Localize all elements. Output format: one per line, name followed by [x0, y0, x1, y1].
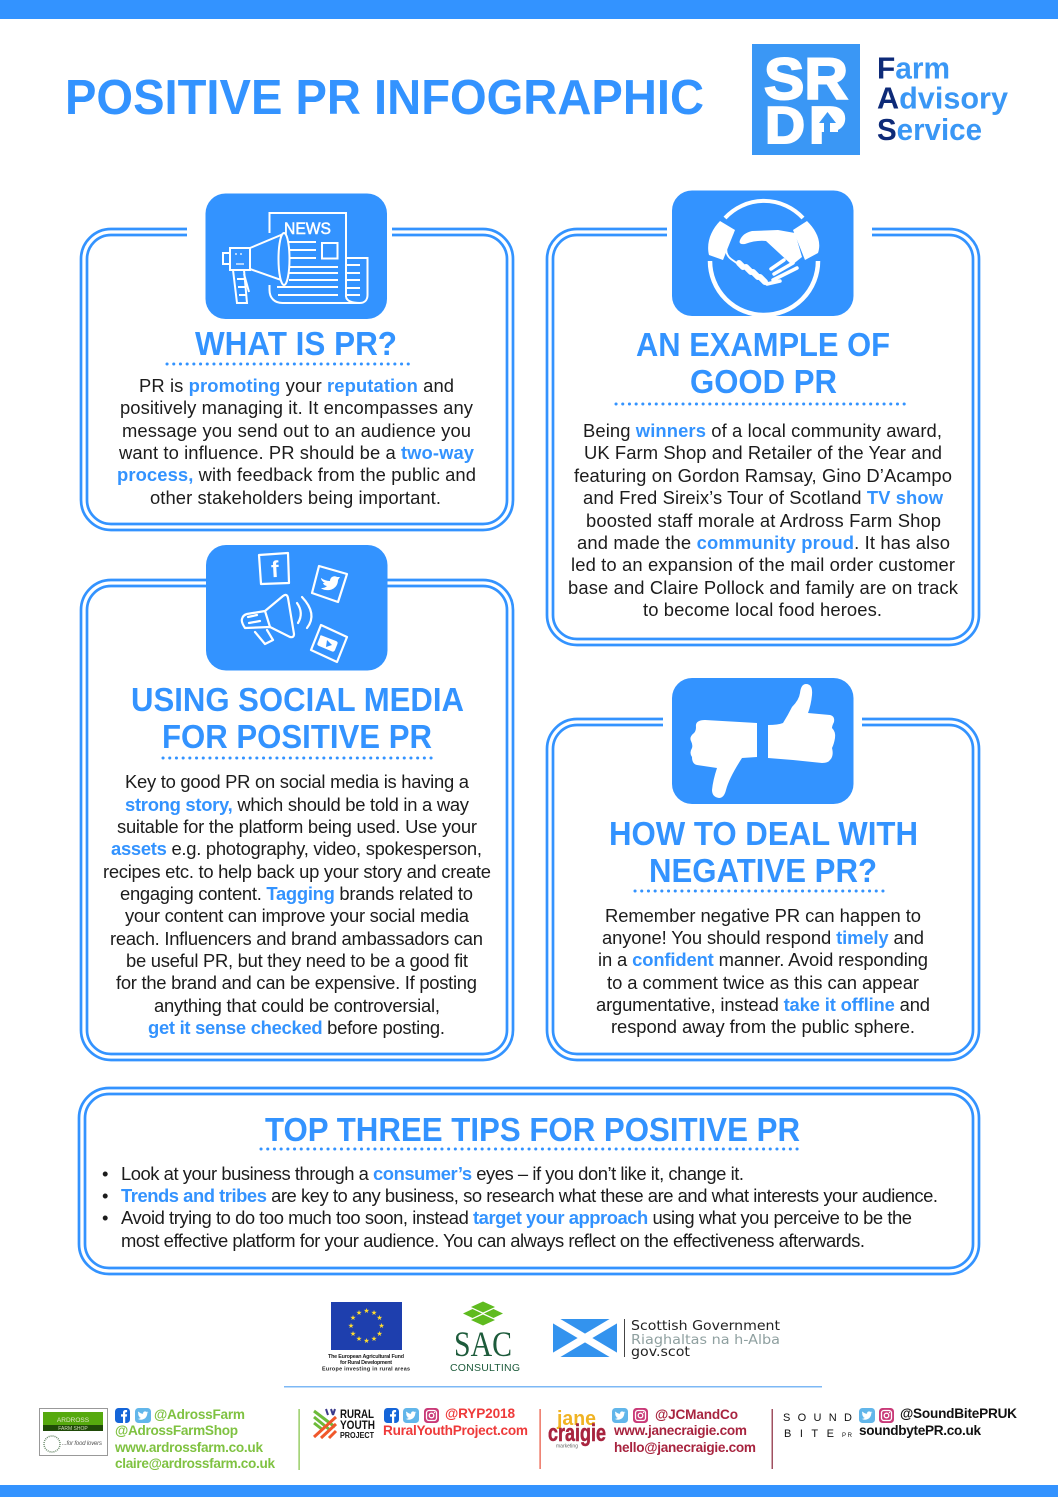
logo: Scottish Government: gov.scot — [631, 1345, 690, 1360]
logo: European Agricultural Fund: ★ — [350, 1314, 356, 1322]
logo: European Agricultural Fund: ★ — [376, 1314, 383, 1322]
body text: Remember negative PR can happen to — [605, 905, 921, 926]
body text: your content can improve your social media — [125, 905, 470, 926]
icon: thumbs down and thumbs up — [672, 678, 854, 804]
footer: Ardross Farm — [40, 1407, 275, 1471]
dotted underline — [635, 890, 888, 892]
body text: reach. Influencers and brand ambassadors can — [110, 928, 483, 949]
logo: Ardross Farm Shop: FARM SHOP — [58, 1426, 88, 1432]
bullet list: Trends and tribes are key to any business, so research what these are and what interests your audience. — [121, 1185, 938, 1206]
logo: Rural Youth Project: RURAL — [340, 1407, 374, 1421]
body text: argumentative, instead take it offline and — [596, 994, 930, 1015]
social icon: twitter — [612, 1408, 628, 1423]
logo: European Agricultural Fund: ★ — [356, 1309, 362, 1317]
body text: respond away from the public sphere. — [611, 1016, 915, 1037]
vertical separator maroon — [772, 1409, 773, 1469]
body text — [596, 905, 930, 1037]
logo: European Agricultural Fund: ★ — [356, 1335, 362, 1343]
body text — [117, 375, 476, 508]
logo: Jane Craigie Marketing: marketing — [556, 1444, 578, 1450]
body text: recipes etc. to help back up your story and create — [103, 861, 491, 882]
social icon: instagram — [879, 1408, 894, 1423]
contact text — [859, 1406, 1017, 1438]
heading: TOP THREE TIPS FOR POSITIVE PR — [265, 1111, 800, 1148]
logo: Jane Craigie Marketing — [548, 1408, 606, 1450]
body text: get it sense checked before posting. — [148, 1017, 445, 1038]
icon: megaphone and social media: f — [270, 556, 280, 582]
social icon: facebook — [115, 1408, 130, 1423]
body text — [103, 771, 491, 1038]
body text: other stakeholders being important. — [150, 487, 441, 508]
icon: megaphone and social media — [206, 545, 388, 670]
body text: strong story, which should be told in a way — [125, 794, 470, 815]
body text: to a comment twice as this can appear — [607, 972, 919, 993]
body text: and Fred Sireix’s Tour of Scotland TV show — [583, 487, 944, 508]
logo: European Agricultural Fund: Europe investing in rural areas — [322, 1366, 410, 1372]
body text: PR is promoting your reputation and — [139, 375, 454, 396]
logo: SRDP Farm Advisory Service: Advisory — [877, 82, 1008, 116]
bullet list: Look at your business through a consumer’s eyes – if you don’t like it, change it. — [121, 1163, 744, 1184]
divider — [284, 1386, 822, 1388]
body text: Key to good PR on social media is having a — [125, 771, 470, 792]
logo: SRDP Farm Advisory Service: SR — [764, 47, 848, 112]
contact text — [383, 1406, 528, 1438]
vertical separator red — [540, 1409, 541, 1469]
contact text — [114, 1407, 275, 1471]
contact text: RuralYouthProject.com — [383, 1423, 528, 1438]
footer: Jane Craigie — [548, 1407, 756, 1455]
body text: boosted staff morale at Ardross Farm Shop — [586, 510, 941, 531]
logo: European Agricultural Fund: ★ — [350, 1330, 356, 1338]
logo: European Agricultural Fund: ★ — [348, 1322, 354, 1330]
bullet list: • — [102, 1207, 108, 1228]
social icon: instagram — [424, 1408, 439, 1423]
contact text: @JCMandCo — [655, 1407, 738, 1422]
contact text: www.janecraigie.com — [613, 1423, 747, 1438]
body text: engaging content. Tagging brands related to — [120, 883, 473, 904]
body text: to become local food heroes. — [643, 599, 882, 620]
title: POSITIVE PR INFOGRAPHIC — [65, 71, 704, 125]
icon: handshake — [672, 190, 854, 316]
logo: SRDP Farm Advisory Service: Farm — [877, 52, 950, 86]
body text: want to influence. PR should be a two-way — [118, 442, 475, 463]
logo: European Agricultural Fund: for Rural Development — [340, 1360, 392, 1366]
social icon: twitter — [403, 1408, 419, 1423]
body text: led to an expansion of the mail order customer — [571, 554, 955, 575]
logo: Sound Bite PR — [783, 1412, 853, 1440]
dotted underline — [167, 362, 413, 366]
body text: be useful PR, but they need to be a good fit — [126, 950, 468, 971]
vertical separator green — [298, 1409, 300, 1470]
logo: SRDP Farm Advisory Service: Service — [877, 113, 982, 147]
contact text: @AdrossFarm — [154, 1407, 245, 1422]
contact text: hello@janecraigie.com — [614, 1440, 756, 1455]
logo: Rural Youth Project: PROJECT — [340, 1431, 374, 1440]
body text: assets e.g. photography, video, spokesperson, — [111, 838, 482, 859]
body text: and made the community proud. It has also — [577, 532, 950, 553]
logo: Rural Youth Project: YOUTH — [340, 1418, 375, 1432]
heading — [609, 815, 918, 889]
social icon: twitter — [135, 1408, 151, 1423]
social icon: instagram — [633, 1408, 648, 1423]
footer: Rural Youth Project — [314, 1406, 528, 1440]
logo: Rural Youth Project — [314, 1407, 375, 1440]
contact text: claire@ardrossfarm.co.uk — [115, 1456, 275, 1471]
bullet list: Avoid trying to do too much too soon, instead target your approach using what you perceive to be the — [121, 1207, 912, 1228]
body text: UK Farm Shop and Retailer of the Year and — [584, 442, 942, 463]
heading: HOW TO DEAL WITH — [609, 815, 918, 852]
body text: featuring on Gordon Ramsay, Gino D’Acampo — [574, 465, 952, 486]
icon: newspaper and megaphone: NEWS — [284, 219, 331, 238]
panel: how to deal with negative PR — [547, 678, 979, 1060]
social icon: facebook — [384, 1408, 399, 1423]
contact text: @SoundBitePRUK — [900, 1406, 1017, 1421]
logo: Jane Craigie Marketing: jane — [556, 1408, 596, 1430]
bullet list: • — [102, 1163, 108, 1184]
bullet list: • — [102, 1185, 108, 1206]
logo: European Agricultural Fund: ★ — [378, 1322, 385, 1330]
bottom bar — [0, 1485, 1058, 1497]
logo: European Agricultural Fund — [322, 1302, 410, 1372]
logo: Ardross Farm Shop: ...for food lovers — [62, 1441, 102, 1447]
logo: Sound Bite PR: BITE — [784, 1428, 834, 1440]
logo: Scottish Government: Riaghaltas na h-Alba — [631, 1333, 780, 1348]
heading: AN EXAMPLE OF — [636, 326, 890, 363]
icon: newspaper and megaphone — [206, 194, 387, 319]
body text — [568, 420, 959, 620]
bullet list: most effective platform for your audience. You can always reflect on the effectiveness afterwards. — [121, 1230, 865, 1251]
logo: SRDP Farm Advisory Service: P — [809, 97, 846, 155]
body text: suitable for the platform being used. Use your — [117, 816, 477, 837]
footer: Sound Bite PR — [783, 1406, 1017, 1440]
dotted underline — [261, 1148, 800, 1150]
body text: process, with feedback from the public and — [117, 464, 476, 485]
logo: SRDP Farm Advisory Service — [752, 44, 1008, 155]
contact text: @AdrossFarmShop — [115, 1423, 238, 1438]
body text: in a confident manner. Avoid responding — [598, 949, 928, 970]
heading — [131, 681, 464, 755]
logo: Ardross Farm Shop: ARDROSS — [57, 1417, 90, 1424]
panel: using social media — [81, 545, 513, 1060]
logo: European Agricultural Fund: ★ — [363, 1337, 370, 1345]
dotted underline — [616, 402, 910, 406]
logo: Sound Bite PR: PR — [842, 1433, 853, 1439]
body text: anything that could be controversial, — [154, 995, 440, 1016]
body text: base and Claire Pollock and family are on track — [568, 577, 959, 598]
heading: GOOD PR — [690, 363, 837, 400]
logo: SAC Consulting — [450, 1302, 520, 1374]
heading: FOR POSITIVE PR — [162, 718, 432, 755]
logo: European Agricultural Fund: ★ — [371, 1309, 377, 1317]
contact text: www.ardrossfarm.co.uk — [114, 1440, 263, 1455]
logo: Jane Craigie Marketing: craigie — [548, 1420, 606, 1447]
body text: Being winners of a local community award, — [583, 420, 942, 441]
panel: top three tips — [79, 1088, 979, 1274]
logo: European Agricultural Fund: ★ — [376, 1330, 383, 1338]
contact text — [613, 1407, 756, 1455]
logo: European Agricultural Fund: ★ — [363, 1307, 370, 1315]
logo: European Agricultural Fund: ★ — [371, 1335, 377, 1343]
logo: Scottish Government — [553, 1319, 780, 1360]
body text: positively managing it. It encompasses any — [120, 397, 474, 418]
logo: SAC Consulting: CONSULTING — [450, 1362, 520, 1374]
heading: USING SOCIAL MEDIA — [131, 681, 464, 718]
body text: for the brand and can be expensive. If posting — [116, 972, 477, 993]
panel: an example of good PR — [547, 190, 979, 645]
logo: SRDP Farm Advisory Service: D — [765, 97, 805, 155]
logo: Sound Bite PR: SOUND — [783, 1412, 852, 1424]
heading: WHAT IS PR? — [195, 325, 397, 362]
body text: anyone! You should respond timely and — [602, 927, 924, 948]
contact text: soundbytePR.co.uk — [859, 1423, 981, 1438]
heading — [636, 326, 890, 400]
social icon: twitter — [859, 1408, 875, 1423]
logo: Ardross Farm Shop — [40, 1408, 108, 1456]
dotted underline — [163, 756, 432, 760]
contact text: @RYP2018 — [445, 1406, 515, 1421]
logo: SAC Consulting: SAC — [454, 1324, 512, 1364]
panel: what is PR — [81, 194, 513, 530]
body text: message you send out to an audience you — [122, 420, 471, 441]
logo: European Agricultural Fund: The European Agricultural Fund — [328, 1354, 404, 1360]
logo: Scottish Government: Scottish Government — [631, 1319, 780, 1334]
top bar — [0, 0, 1058, 19]
heading: NEGATIVE PR? — [649, 852, 877, 889]
bullet list — [102, 1163, 938, 1251]
